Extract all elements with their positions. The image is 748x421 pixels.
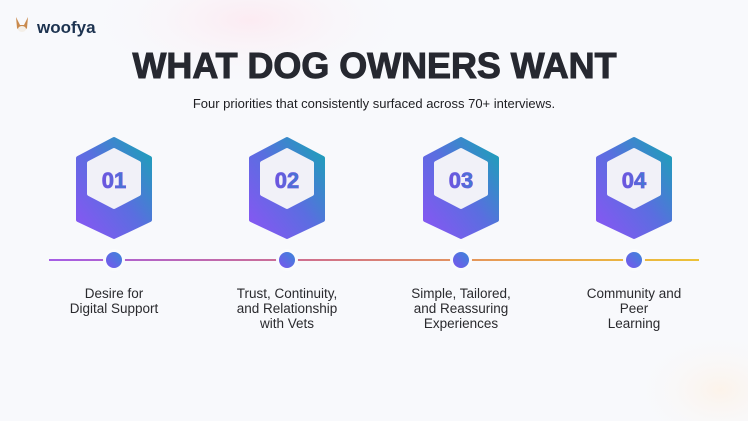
step 04: [587, 139, 681, 331]
icon: hexagon 01: 01: [102, 168, 126, 193]
label: and Reassuring: [414, 301, 508, 316]
label: Experiences: [424, 316, 498, 331]
label: Learning: [608, 316, 660, 331]
dot: [623, 249, 645, 271]
icon: dog: [16, 17, 28, 32]
step 03: [411, 139, 511, 331]
timeline line: [49, 259, 699, 261]
logo: woofya: woofya: [36, 18, 96, 37]
step 01: [70, 139, 159, 316]
label: Community and: [587, 286, 681, 301]
label: with Vets: [259, 316, 314, 331]
icon: hexagon 04: [598, 139, 670, 237]
label: Desire for: [85, 286, 144, 301]
icon: hexagon 01: [78, 139, 150, 237]
title: WHAT DOG OWNERS WANT: [132, 45, 617, 86]
label: Digital Support: [70, 301, 159, 316]
dot: [450, 249, 472, 271]
icon: hexagon 02: [251, 139, 323, 237]
icon: hexagon 02: 02: [275, 168, 299, 193]
label: Simple, Tailored,: [411, 286, 511, 301]
icon: hexagon 03: [425, 139, 497, 237]
dot: [103, 249, 125, 271]
icon: hexagon 04: 04: [622, 168, 647, 193]
label: Peer: [620, 301, 649, 316]
step 02: [237, 139, 337, 331]
subtitle: Four priorities that consistently surfaced across 70+ interviews.: [193, 96, 555, 111]
label: Trust, Continuity,: [237, 286, 337, 301]
label: and Relationship: [237, 301, 337, 316]
dot: [276, 249, 298, 271]
icon: hexagon 03: 03: [449, 168, 473, 193]
logo: woofya: [16, 17, 96, 37]
